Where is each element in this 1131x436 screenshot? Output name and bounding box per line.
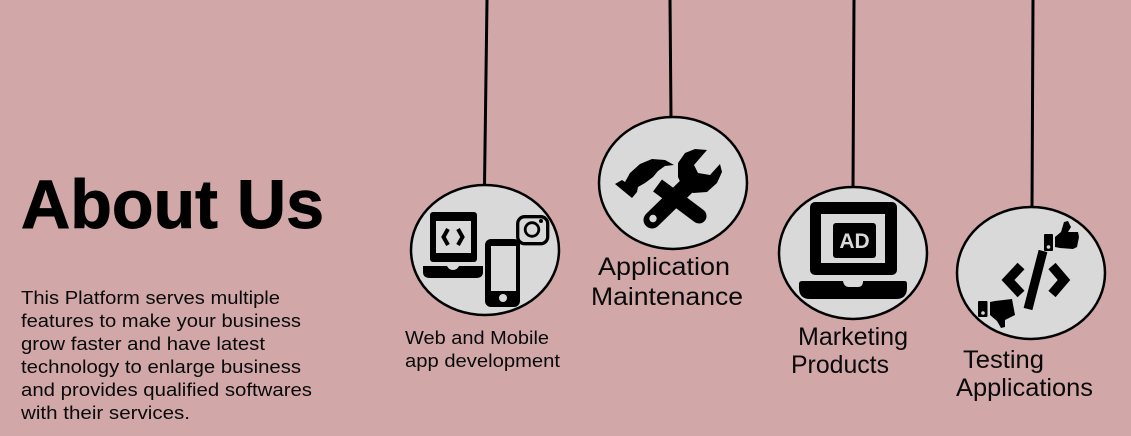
label: testing applications: Applications bbox=[956, 374, 1093, 402]
label: web and mobile app development: app development bbox=[405, 350, 560, 371]
label: application maintenance: Maintenance bbox=[591, 283, 743, 311]
hanging line 2 bbox=[670, 0, 671, 118]
hanging line 3 bbox=[853, 0, 854, 188]
label: marketing products: Products bbox=[791, 351, 889, 379]
icon: thumbs up bbox=[1044, 221, 1079, 251]
icon: hammer and wrench bbox=[615, 149, 722, 222]
description text block: technology to enlarge business bbox=[21, 356, 301, 377]
item: marketing products bbox=[779, 0, 927, 379]
icon: smartphone bbox=[485, 239, 520, 307]
hanging line 1 bbox=[484, 0, 487, 186]
title: About Us bbox=[21, 166, 324, 243]
label: marketing products: Marketing bbox=[798, 323, 908, 351]
description text block: grow faster and have latest bbox=[21, 333, 265, 354]
label: testing applications: Testing bbox=[963, 346, 1044, 374]
circle 4 bbox=[957, 207, 1105, 339]
description text block: This Platform serves multiple bbox=[21, 287, 280, 308]
label: marketing products bbox=[791, 323, 908, 379]
description text block: with their services. bbox=[20, 402, 190, 423]
item: testing applications bbox=[956, 0, 1105, 402]
circle 3 bbox=[779, 187, 927, 319]
icon: code symbol bbox=[1008, 251, 1064, 309]
hanging line 4 bbox=[1032, 0, 1033, 208]
icon: instagram bbox=[518, 217, 548, 244]
item: application maintenance bbox=[591, 0, 747, 311]
label: web and mobile app development bbox=[405, 327, 560, 371]
description text block bbox=[20, 287, 312, 423]
label: application maintenance bbox=[591, 253, 743, 311]
icon: laptop with ad bbox=[799, 202, 907, 299]
icon: laptop with ad: AD bbox=[839, 230, 870, 253]
circle 2 bbox=[599, 117, 747, 249]
label: testing applications bbox=[956, 346, 1093, 402]
description text block: features to make your business bbox=[21, 310, 301, 331]
label: web and mobile app development: Web and Mobile bbox=[405, 327, 549, 348]
circle 1 bbox=[411, 185, 559, 315]
label: application maintenance: Application bbox=[598, 253, 730, 281]
icon: laptop with code bbox=[423, 212, 483, 278]
icon: thumbs down bbox=[978, 299, 1015, 328]
description text block: and provides qualified softwares bbox=[21, 379, 312, 400]
item: web and mobile app development bbox=[405, 0, 560, 371]
